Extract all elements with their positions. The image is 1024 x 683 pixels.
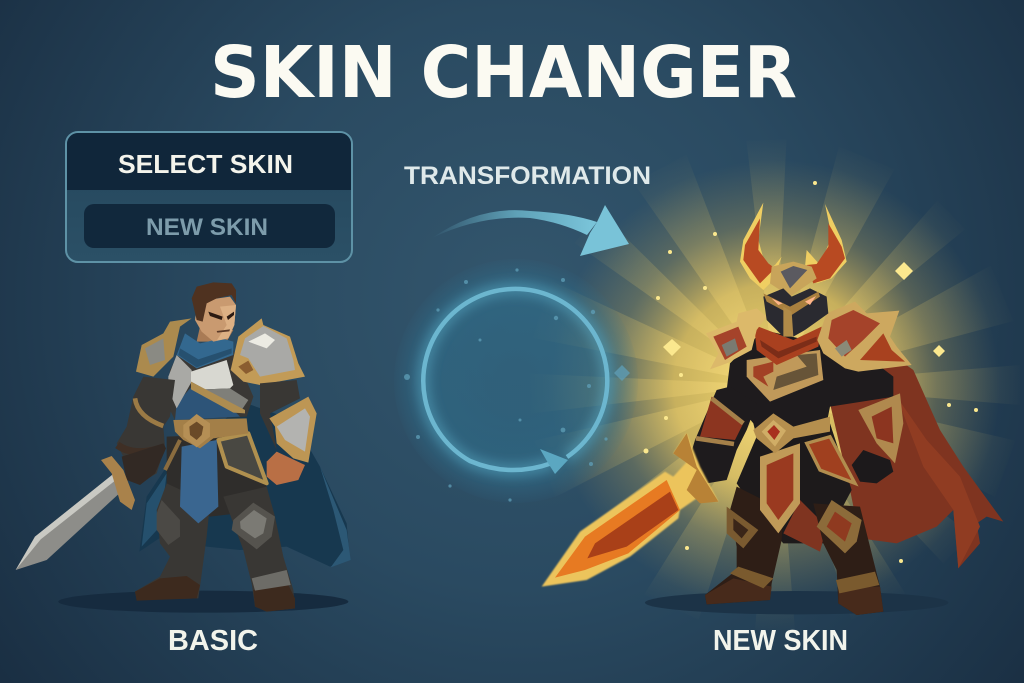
helmet xyxy=(763,262,828,337)
left pauldron xyxy=(706,308,767,369)
belt and tabard xyxy=(165,414,267,523)
panel: select skin xyxy=(66,132,352,262)
flaming sword xyxy=(542,433,718,587)
portal circle with arrow xyxy=(394,259,638,503)
legs and boots xyxy=(135,433,295,612)
head xyxy=(192,282,236,342)
right arm and fist xyxy=(852,393,903,483)
ground shadow xyxy=(645,591,948,614)
golden rays burst xyxy=(529,139,1020,630)
left arm and glove xyxy=(690,387,757,483)
torso armour xyxy=(167,350,253,420)
label: new skin: NEW SKIN xyxy=(713,625,848,657)
left pauldron xyxy=(136,318,192,377)
option label: NEW SKIN xyxy=(146,214,268,241)
panel header xyxy=(67,133,351,190)
right arm and fist xyxy=(260,380,317,485)
cape xyxy=(139,403,351,567)
character: basic knight xyxy=(16,282,351,613)
label: basic: BASIC xyxy=(168,625,258,657)
title: SKIN CHANGER xyxy=(210,31,797,114)
right pauldron xyxy=(231,318,305,385)
horns xyxy=(740,203,847,290)
label: transformation: TRANSFORMATION xyxy=(404,162,651,190)
neck xyxy=(197,327,233,342)
particles xyxy=(404,268,630,502)
chest plate xyxy=(747,325,823,402)
right pauldron xyxy=(817,302,912,372)
character: new skin knight xyxy=(542,203,1003,615)
scarf xyxy=(177,333,233,368)
sparkles xyxy=(644,181,978,563)
sword xyxy=(16,456,135,570)
heading: select skin: SELECT SKIN xyxy=(118,149,293,179)
legs and boots xyxy=(705,423,883,615)
ground shadow xyxy=(58,591,348,613)
cape xyxy=(830,353,1003,568)
dropdown option xyxy=(84,204,335,248)
belt and tabard xyxy=(753,413,855,533)
torso xyxy=(727,330,893,437)
arrow: transformation xyxy=(432,205,629,256)
left arm and glove xyxy=(117,377,175,485)
